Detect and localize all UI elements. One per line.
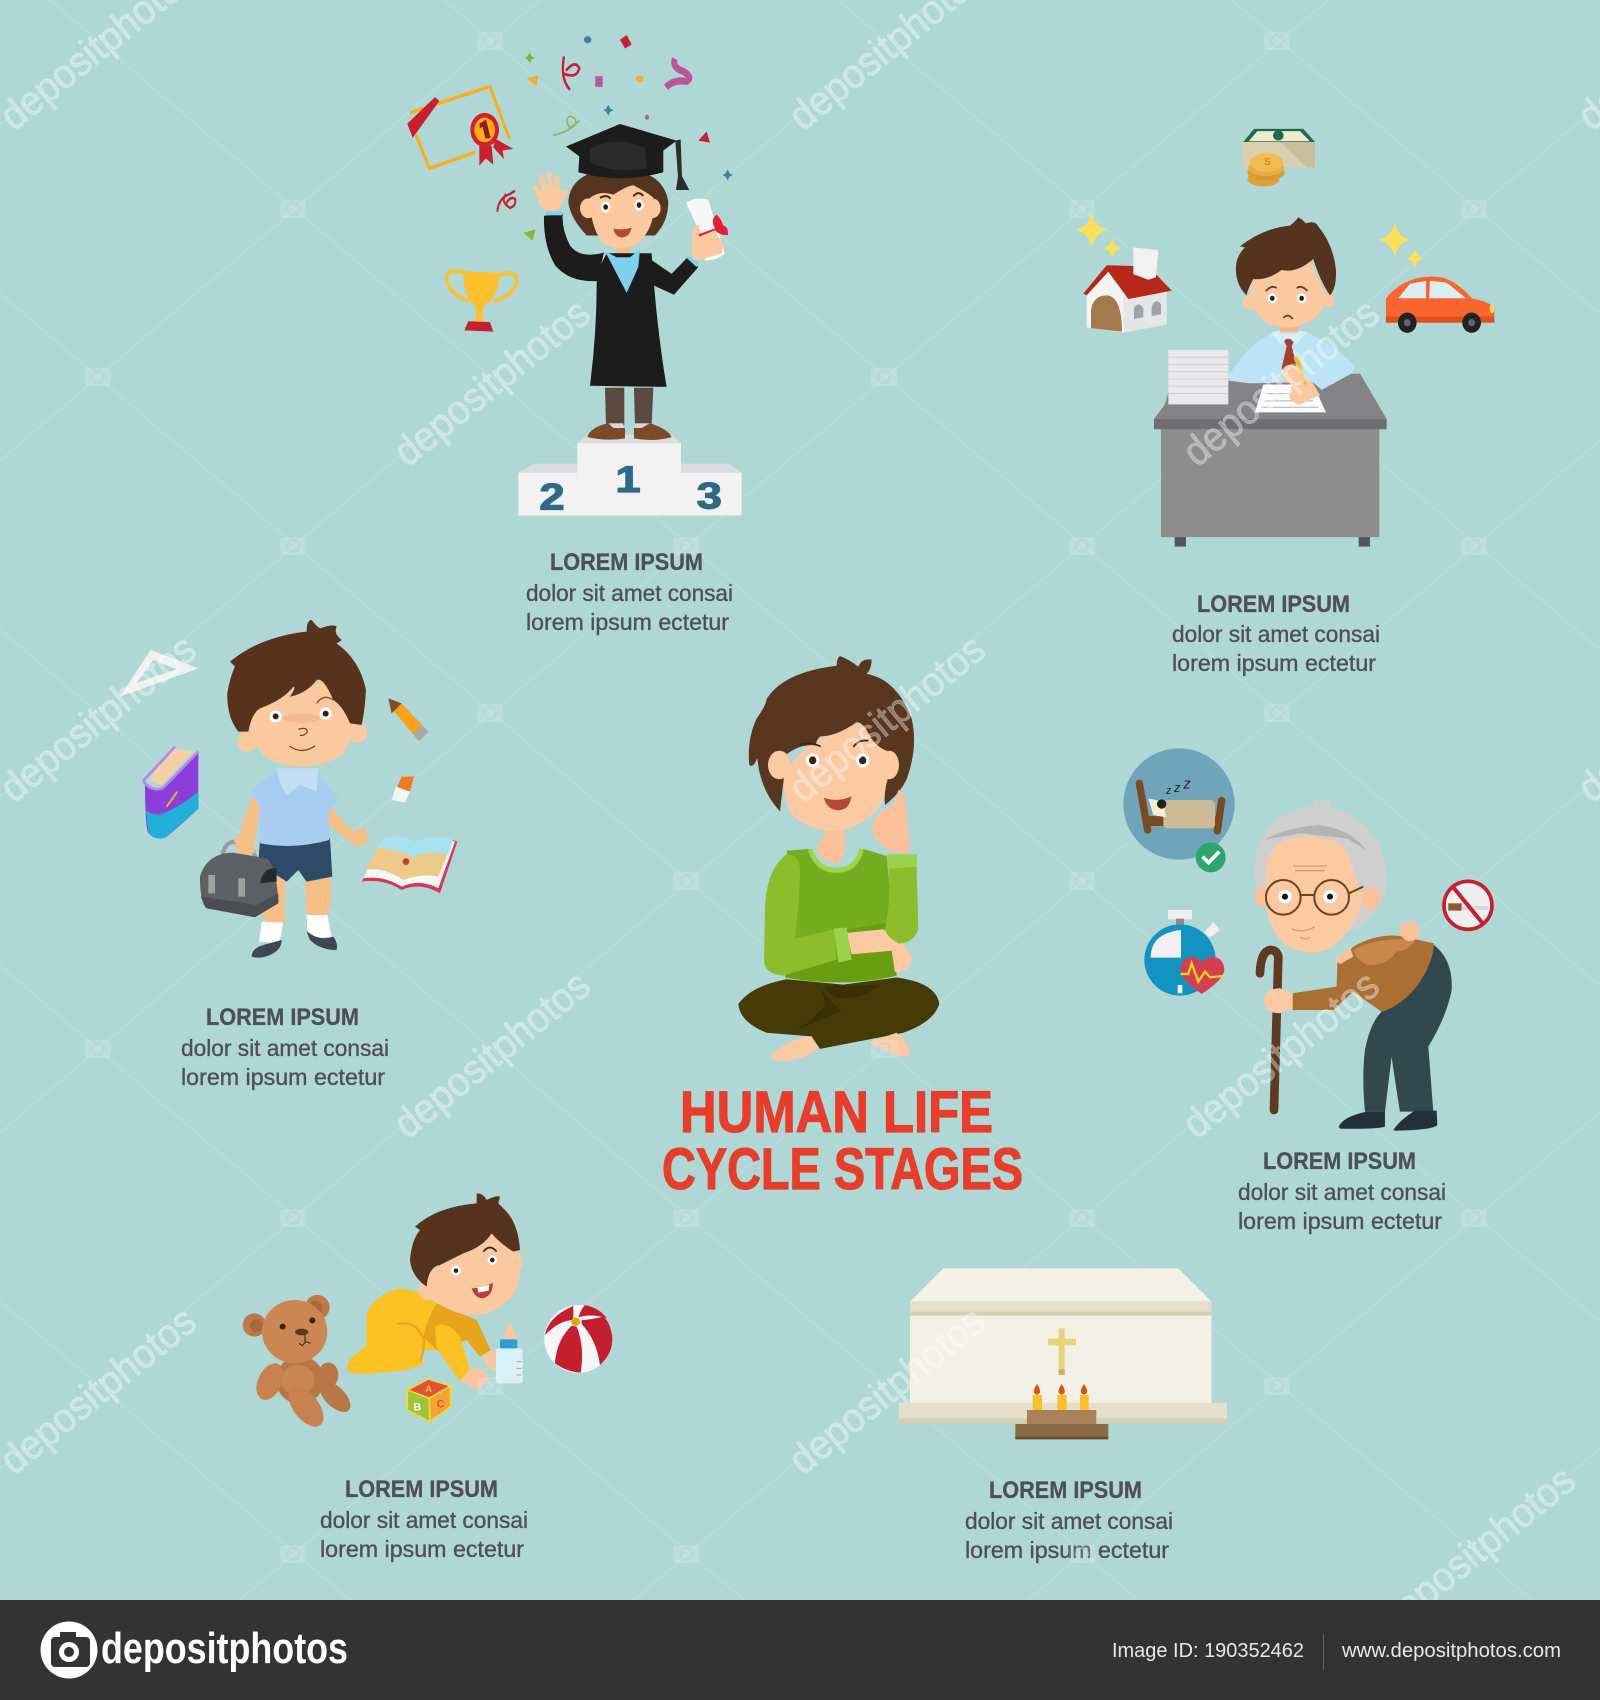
confetti xyxy=(497,35,733,241)
child figure xyxy=(200,620,368,958)
text block: school child: LOREM IPSUM xyxy=(206,1004,359,1031)
text block: graduate xyxy=(526,549,733,635)
podium xyxy=(518,434,742,518)
icon: sleep xyxy=(1123,748,1235,872)
footer logo text: depositphotos xyxy=(101,1624,348,1673)
icon: money and coins xyxy=(1243,129,1315,186)
icon: alphabet block xyxy=(407,1379,451,1422)
altar steps xyxy=(1015,1410,1108,1439)
text block: graduate: dolor sit amet consai xyxy=(526,580,733,606)
podium: 1 xyxy=(615,458,641,500)
text block: school child: dolor sit amet consai xyxy=(181,1035,389,1061)
text block: worker: dolor sit amet consai xyxy=(1172,621,1380,647)
icon: teddy bear xyxy=(243,1295,356,1433)
graduate figure xyxy=(535,124,728,440)
footer image id: Image ID: 190352462 xyxy=(1112,1640,1304,1662)
text block: baby: lorem ipsum ectetur xyxy=(320,1536,524,1562)
icon: lunch bag xyxy=(200,837,278,917)
icon: alphabet block: C xyxy=(437,1398,445,1410)
watermark text: depositphotos xyxy=(1174,289,1388,475)
center figure xyxy=(738,656,939,1061)
stage: graduate with podium xyxy=(407,35,742,518)
text block: school child xyxy=(181,1004,389,1090)
podium: 3 xyxy=(697,475,722,517)
icon: eraser xyxy=(392,777,414,803)
icon: car xyxy=(1386,276,1494,333)
paper stack xyxy=(1168,350,1228,404)
icon: set square xyxy=(120,650,198,697)
text block: worker: LOREM IPSUM xyxy=(1197,591,1350,618)
baby figure xyxy=(347,1193,522,1390)
footer bar xyxy=(0,1600,1600,1700)
icon: pencil xyxy=(388,698,428,741)
watermark text: depositphotos xyxy=(780,1297,994,1483)
watermark text: depositphotos xyxy=(385,961,599,1147)
title: HUMAN LIFE xyxy=(680,1080,993,1145)
icon: certificate xyxy=(407,86,513,168)
icon: money and coins: S xyxy=(1264,157,1271,168)
text block: elderly xyxy=(1238,1148,1446,1234)
elderly figure xyxy=(1254,798,1452,1131)
icon: depositphotos logo xyxy=(40,1622,98,1678)
icon: house xyxy=(1083,247,1172,332)
stage: elderly man xyxy=(1123,748,1492,1131)
title: CYCLE STAGES xyxy=(662,1137,1023,1202)
icon: alphabet block: B xyxy=(413,1402,421,1414)
text block: tomb: lorem ipsum ectetur xyxy=(965,1537,1169,1563)
stage: young adult thinking xyxy=(738,656,939,1061)
text block: tomb: LOREM IPSUM xyxy=(989,1477,1142,1504)
stage: school child xyxy=(120,620,457,958)
text block: elderly: dolor sit amet consai xyxy=(1238,1179,1446,1205)
icon: cross xyxy=(1048,1328,1076,1375)
watermark text: depositphotos xyxy=(1370,1456,1584,1642)
icon: open book xyxy=(362,836,457,893)
watermark camera icons xyxy=(85,32,1487,1563)
icon: beach ball xyxy=(544,1305,612,1373)
text block: elderly: lorem ipsum ectetur xyxy=(1238,1208,1442,1234)
desk xyxy=(1154,374,1387,547)
icon: stopwatch and heart xyxy=(1144,910,1224,996)
icon: no smoking xyxy=(1444,881,1492,929)
icon: baby bottle xyxy=(496,1323,523,1383)
icon: sleep: z xyxy=(1173,781,1181,795)
watermark text: depositphotos xyxy=(780,625,994,811)
watermark text: depositphotos xyxy=(385,289,599,475)
text block: tomb xyxy=(965,1477,1173,1563)
text block: school child: lorem ipsum ectetur xyxy=(181,1064,385,1090)
watermark text: depositphotos xyxy=(1174,961,1388,1147)
text block: elderly: LOREM IPSUM xyxy=(1263,1148,1416,1175)
icon: sleep: z xyxy=(1182,777,1191,793)
icon: sleep: z xyxy=(1165,785,1172,797)
worker figure xyxy=(1228,217,1355,412)
text block: worker: lorem ipsum ectetur xyxy=(1172,650,1376,676)
text block: graduate: LOREM IPSUM xyxy=(550,549,703,576)
footer site url: www.depositphotos.com xyxy=(1341,1640,1561,1662)
icon: sparkles xyxy=(1076,213,1424,268)
icon: candles xyxy=(1033,1384,1089,1410)
title xyxy=(662,1080,1023,1202)
text block: graduate: lorem ipsum ectetur xyxy=(526,609,729,635)
podium: 2 xyxy=(539,475,565,518)
stage: baby xyxy=(243,1193,612,1433)
text block: baby: LOREM IPSUM xyxy=(345,1476,498,1503)
stage: office worker xyxy=(1076,129,1494,547)
stage: tomb xyxy=(899,1268,1227,1439)
icon: storybook xyxy=(143,747,198,839)
text block: baby xyxy=(320,1476,528,1562)
text block: baby: dolor sit amet consai xyxy=(320,1507,528,1533)
icon: trophy xyxy=(447,271,517,332)
text block: tomb: dolor sit amet consai xyxy=(965,1508,1173,1534)
text block: worker xyxy=(1172,591,1380,676)
icon: alphabet block: A xyxy=(425,1384,432,1394)
